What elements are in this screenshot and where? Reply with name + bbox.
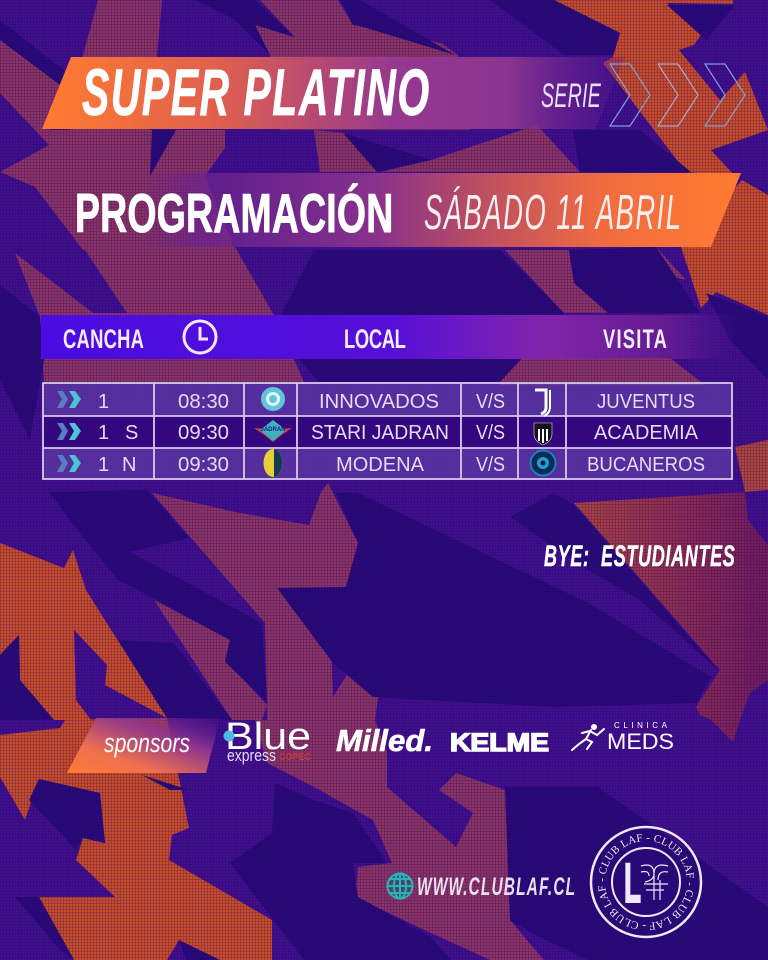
row 3: modena vs bucaneros: BUCANEROS bbox=[587, 454, 705, 476]
icon: academia crest bbox=[534, 423, 552, 445]
heading: super platino: SUPER PLATINO bbox=[82, 55, 429, 129]
logo: blue express copec: express bbox=[227, 746, 276, 765]
icon: globe bbox=[388, 874, 413, 898]
label: serie: SERIE bbox=[541, 76, 601, 114]
icon: stari jadran crest: JADRAN bbox=[260, 427, 286, 433]
row 3: modena vs bucaneros: N bbox=[122, 454, 136, 476]
row 2: stari jadran vs academia: 09:30 bbox=[178, 422, 229, 444]
banner: super platino serie bbox=[42, 55, 625, 129]
logo: club laf seal bbox=[590, 826, 702, 938]
row 2: stari jadran vs academia bbox=[57, 420, 699, 445]
icon: modena crest bbox=[264, 449, 282, 477]
heading: programacion: PROGRAMACIÓN bbox=[75, 182, 393, 244]
logo: blue express copec: COPEC bbox=[279, 752, 311, 763]
row 2: stari jadran vs academia: V/S bbox=[476, 422, 505, 444]
row 1: innovados vs juventus: 1 bbox=[98, 391, 109, 413]
fixtures table bbox=[43, 382, 732, 479]
table header bar bbox=[41, 315, 741, 359]
row 3: modena vs bucaneros: 1 bbox=[98, 454, 109, 476]
icon: bucaneros crest bbox=[530, 450, 556, 476]
logo: blue express copec: Blue bbox=[225, 716, 311, 758]
row 2: stari jadran vs academia: ACADEMIA bbox=[594, 422, 699, 444]
row 1: innovados vs juventus bbox=[57, 387, 695, 416]
sponsors banner bbox=[67, 718, 220, 773]
header: cancha: CANCHA bbox=[63, 323, 144, 354]
icon: stari jadran crest bbox=[254, 420, 292, 442]
header: visita: VISITA bbox=[603, 323, 667, 354]
row 3: modena vs bucaneros: V/S bbox=[476, 454, 505, 476]
row 3: modena vs bucaneros: 09:30 bbox=[178, 454, 229, 476]
row 1: innovados vs juventus: INNOVADOS bbox=[319, 391, 439, 413]
icon: runner bbox=[572, 725, 604, 750]
logo: clinica meds bbox=[572, 721, 674, 754]
label: sponsors: sponsors bbox=[104, 728, 190, 758]
logo: milled: Milled. bbox=[336, 723, 433, 758]
row 1 chevrons bbox=[57, 391, 81, 408]
date: sabado 11 abril: SÁBADO 11 ABRIL bbox=[424, 186, 681, 240]
row 3: modena vs bucaneros: MODENA bbox=[336, 454, 425, 476]
logo: kelme: KELME bbox=[450, 729, 549, 757]
icon: innovados crest bbox=[261, 387, 285, 411]
icon: clock bbox=[184, 321, 216, 353]
row 3: modena vs bucaneros bbox=[57, 449, 705, 477]
row 1: innovados vs juventus: V/S bbox=[476, 391, 505, 413]
row 1: innovados vs juventus: JUVENTUS bbox=[597, 391, 695, 413]
bye note: BYE: ESTUDIANTES bbox=[544, 541, 735, 573]
row 2: stari jadran vs academia: S bbox=[125, 422, 138, 444]
icon: juventus crest bbox=[535, 390, 550, 416]
row 2: stari jadran vs academia: 1 bbox=[98, 422, 109, 444]
row fills bbox=[43, 382, 732, 479]
row 2 chevrons bbox=[57, 423, 81, 440]
row 3 chevrons bbox=[57, 455, 81, 472]
table grid bbox=[43, 383, 732, 479]
header: local: LOCAL bbox=[344, 323, 406, 354]
row 1: innovados vs juventus: 08:30 bbox=[178, 391, 229, 413]
row 2: stari jadran vs academia: STARI JADRAN bbox=[311, 422, 449, 444]
icon: outlined chevrons bbox=[610, 64, 745, 126]
logo: clinica meds: CLINICA bbox=[614, 721, 668, 730]
website url: WWW.CLUBLAF.CL bbox=[417, 873, 575, 901]
logo: clinica meds: MEDS bbox=[607, 729, 674, 754]
banner: programacion date bbox=[40, 173, 741, 247]
seal monogram: L bbox=[624, 851, 641, 914]
seal ring text: - CLUB LAF - CLUB LAF - CLUB LAF - CLUB LAF bbox=[598, 834, 694, 930]
